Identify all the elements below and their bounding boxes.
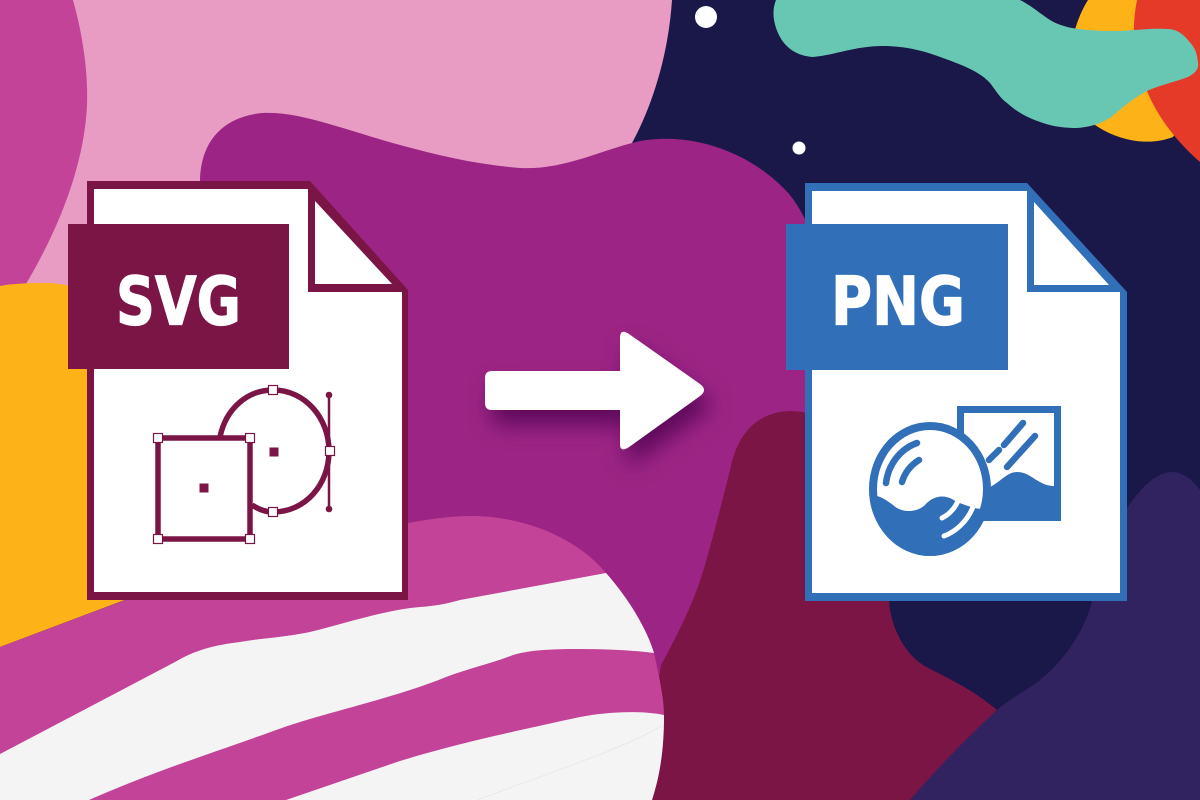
PNG label: [786, 224, 1008, 370]
folded corner: [315, 201, 392, 284]
icon: vector shapes with handles: [154, 386, 334, 544]
document page: [812, 191, 1120, 593]
background: orange circle top right: [1070, 0, 1200, 142]
file icon: SVG: [68, 181, 408, 600]
background: maroon blob: [640, 411, 997, 800]
decorative dot small: [792, 142, 806, 154]
file icon: PNG: [786, 183, 1127, 601]
upper white stripe: [0, 573, 654, 800]
document outline: [805, 183, 1127, 601]
folded corner: [1034, 202, 1109, 285]
arrow: [485, 332, 704, 449]
background: magenta blob top left: [0, 0, 87, 290]
background: striped magenta blob: [0, 516, 664, 800]
background: dark purple blob: [910, 472, 1200, 800]
background: light pink blob: [0, 0, 672, 320]
background: teal blob: [773, 0, 1198, 128]
SVG label: [68, 224, 289, 369]
lower white stripe: [286, 712, 664, 800]
background: orange blob left: [0, 283, 130, 647]
background: purple blob centre: [190, 113, 815, 720]
background: red blob top right: [1134, 0, 1200, 162]
document outline: [87, 181, 408, 600]
icon: glossy ball: [865, 422, 995, 560]
icon: picture frame: [957, 406, 1061, 521]
SVG label: SVG: [116, 262, 241, 340]
PNG label: PNG: [831, 262, 965, 340]
document page: [94, 189, 402, 592]
decorative dot large: [695, 6, 717, 28]
